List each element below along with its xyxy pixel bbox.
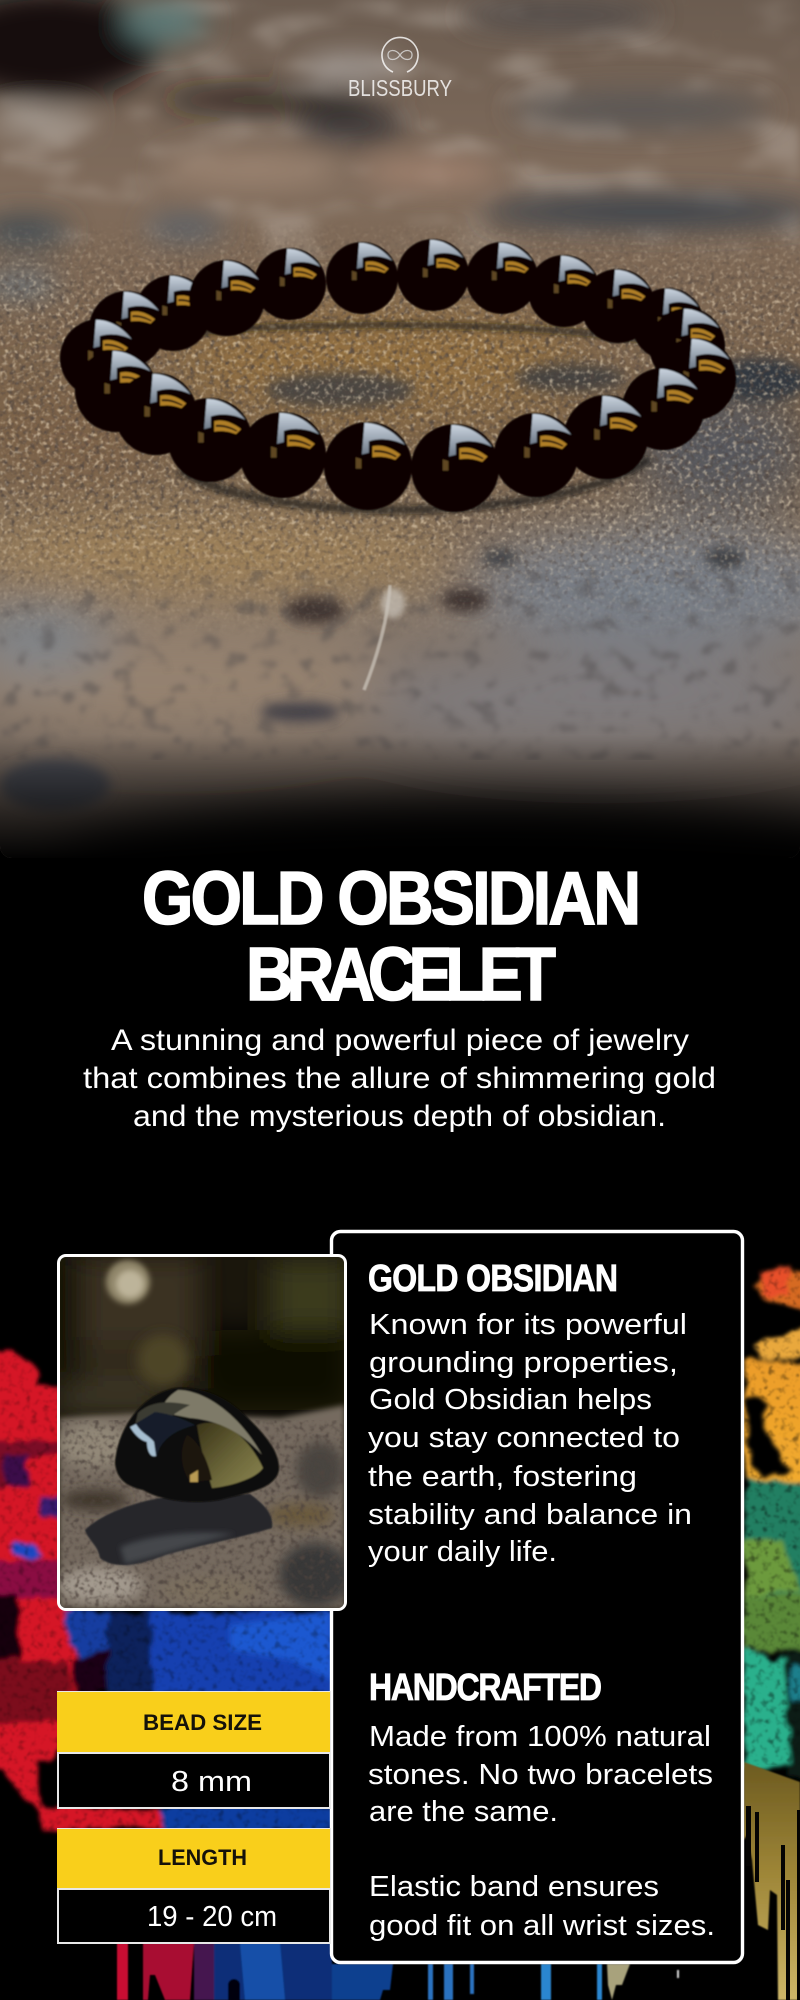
body: Gold Obsidian description: grounding properties, xyxy=(369,1347,678,1379)
body: Gold Obsidian description: you stay connected to xyxy=(368,1422,680,1454)
title: GOLD OBSIDIAN xyxy=(142,856,641,940)
heading: Handcrafted: HANDCRAFTED xyxy=(369,1667,602,1709)
spec box: bead size xyxy=(57,1692,330,1808)
spec box: bead size: 8 mm xyxy=(171,1766,252,1798)
logo: Blissbury xyxy=(348,37,452,101)
main text card xyxy=(332,1232,742,1962)
body: Handcrafted description: are the same. xyxy=(369,1796,558,1828)
dark shadow ring under the beads xyxy=(180,325,670,510)
spec box: bead size: BEAD SIZE xyxy=(143,1710,262,1735)
bottom fade xyxy=(0,735,800,858)
logo: Blissbury: BLISSBURY xyxy=(348,75,452,101)
body: Gold Obsidian description: Gold Obsidian helps xyxy=(369,1384,652,1416)
intro paragraph xyxy=(83,1024,716,1133)
title: BRACELET xyxy=(246,932,556,1016)
body: Gold Obsidian description: the earth, fostering xyxy=(368,1461,637,1493)
body: Handcrafted description: stones. No two bracelets xyxy=(368,1759,713,1791)
hero photo: bracelet on stone xyxy=(0,0,800,940)
title xyxy=(142,856,641,1016)
body: Gold Obsidian description: stability and balance in xyxy=(368,1499,692,1531)
paint splash: left red and blue xyxy=(0,1340,340,1840)
body: Handcrafted description: Elastic band ensures xyxy=(369,1871,659,1903)
rock ground xyxy=(59,1405,345,1609)
bracelet beads xyxy=(60,239,736,512)
intro paragraph: A stunning and powerful piece of jewelry xyxy=(111,1024,689,1057)
stone shadow xyxy=(85,1494,272,1565)
intro paragraph: that combines the allure of shimmering gold xyxy=(83,1062,716,1095)
body: Gold Obsidian description: Known for its powerful xyxy=(369,1309,687,1341)
body: Gold Obsidian description xyxy=(368,1309,692,1568)
stone photo xyxy=(57,1254,351,1611)
intro paragraph: and the mysterious depth of obsidian. xyxy=(133,1100,666,1133)
body: Handcrafted description xyxy=(368,1721,715,1942)
spec box: length: LENGTH xyxy=(158,1845,247,1870)
spec box: length xyxy=(57,1829,330,1943)
body: Handcrafted description: good fit on all wrist sizes. xyxy=(369,1910,715,1942)
paint splash: right orange, teal and gold xyxy=(744,1265,800,2000)
body: Handcrafted description: Made from 100% natural xyxy=(369,1721,711,1753)
body: Gold Obsidian description: your daily life. xyxy=(368,1536,557,1568)
obsidian stone xyxy=(115,1388,279,1502)
paint splash: bottom drips xyxy=(117,1943,679,2000)
spec box: length: 19 - 20 cm xyxy=(147,1901,277,1933)
heading: Gold Obsidian: GOLD OBSIDIAN xyxy=(368,1258,618,1300)
